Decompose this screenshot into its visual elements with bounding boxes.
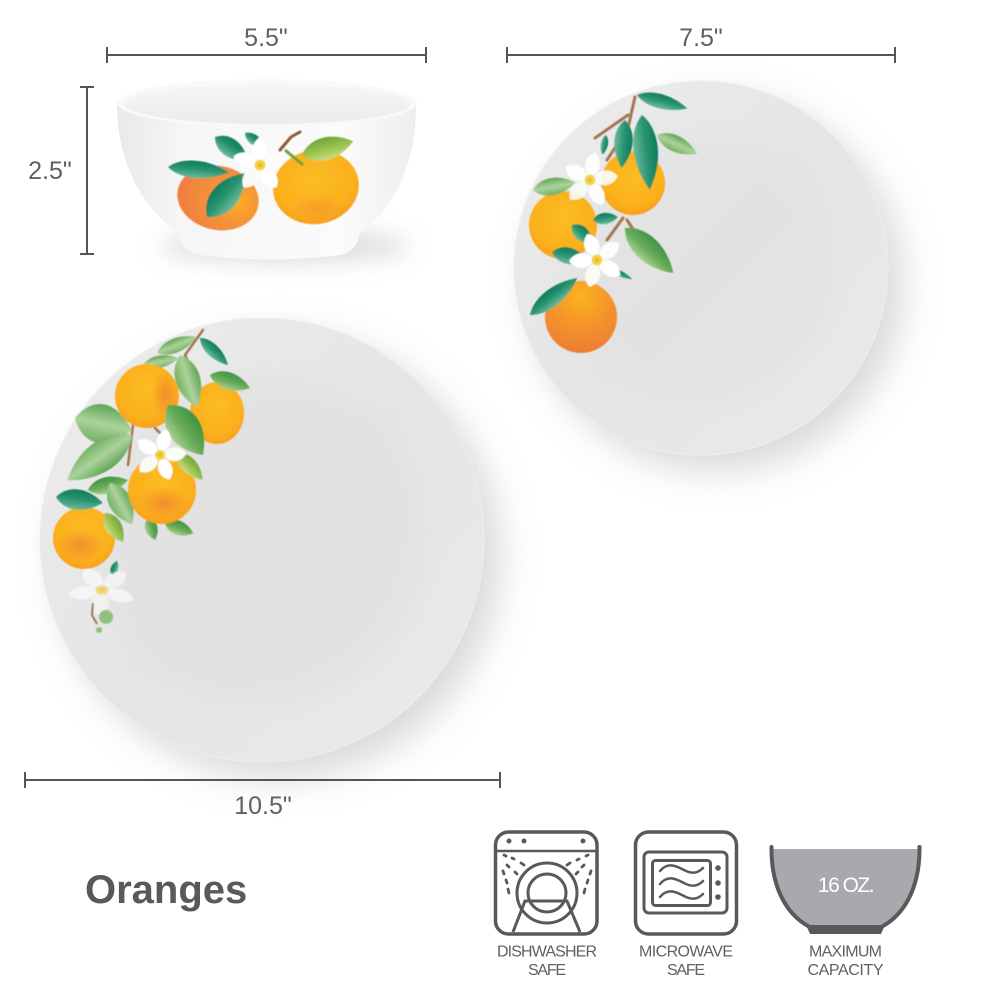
- bowl orange decoration: [167, 129, 365, 238]
- icon: dishwasher safe: [495, 832, 597, 934]
- icon: microwave safe: [636, 832, 736, 934]
- icon: bowl maximum capacity 16 oz: 16 OZ.: [818, 874, 873, 897]
- label: dishwasher safe: DISHWASHER: [497, 944, 597, 960]
- bowl: [117, 79, 417, 260]
- medium plate orange decoration: [525, 88, 700, 353]
- medium plate: [514, 81, 903, 471]
- dimension: large plate width 10.5 in: [25, 772, 500, 820]
- label: microwave safe: SAFE: [667, 962, 705, 979]
- large plate: [40, 318, 500, 778]
- dimension: bowl width 5.5 in: [107, 24, 426, 63]
- label: maximum capacity: CAPACITY: [808, 962, 884, 979]
- label: dishwasher safe: SAFE: [528, 962, 566, 979]
- title: Oranges: Oranges: [85, 868, 247, 912]
- dimension: medium plate width 7.5 in: 7.5": [679, 24, 723, 52]
- dimension: bowl height 2.5 in: [28, 87, 94, 254]
- dimension: bowl width 5.5 in: 5.5": [244, 24, 288, 52]
- large plate orange decoration: [53, 330, 253, 633]
- label: maximum capacity: MAXIMUM: [809, 944, 882, 960]
- dimension: bowl height 2.5 in: 2.5": [28, 157, 72, 185]
- icon: bowl maximum capacity 16 oz: [771, 847, 920, 934]
- label: microwave safe: MICROWAVE: [639, 944, 733, 960]
- dimension: medium plate width 7.5 in: [507, 24, 895, 63]
- dimension: large plate width 10.5 in: 10.5": [234, 792, 292, 820]
